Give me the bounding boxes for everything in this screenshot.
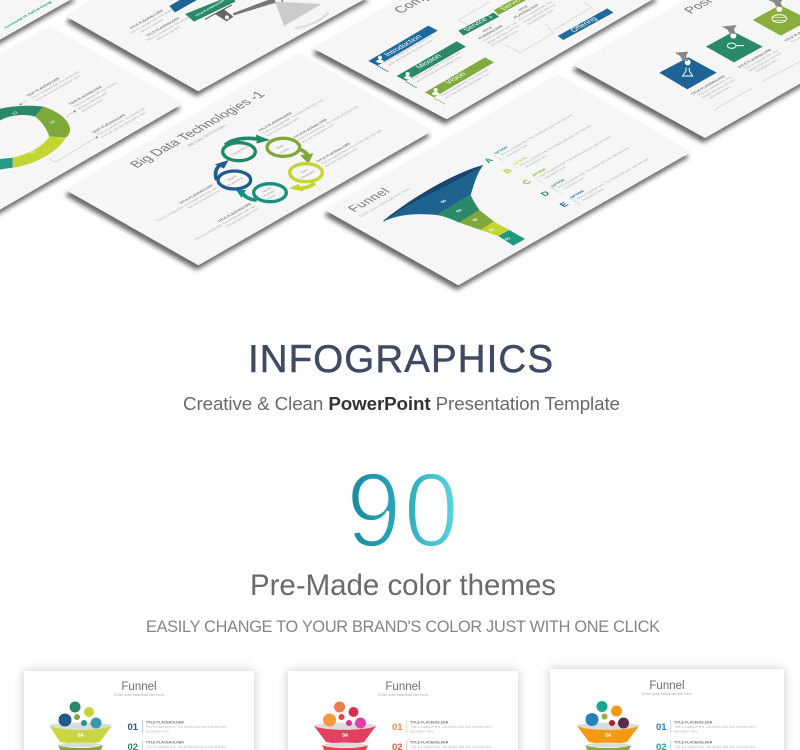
option E: This is a sample text. You simply add your own text and [575,158,650,200]
panel: theme preview 1 [24,671,254,750]
option C: description here. [543,165,568,180]
option A: description here. [505,143,530,158]
bar text: vision: This is a sample text. You simply add [439,68,490,97]
text block [473,17,526,47]
panel: isometric slides, left column [0,0,429,263]
note text: blue: This is a sample text. You [696,76,733,97]
donut labels: 03 [29,150,38,155]
text block: TITLE [481,26,494,33]
text block: text and description here. [324,147,360,167]
text block: This is a sample text. You simply [128,9,174,34]
donut segment teal [0,158,13,170]
text block: TITLE PLACEHOLDER [178,184,215,205]
option C: C [519,178,534,186]
connector lines [458,2,592,53]
card subtitle: Enter your subhead line here [114,692,164,697]
cycle arrows [215,135,315,200]
box: offering [558,8,613,40]
text block: add your own text [138,19,165,34]
cycle node: left: Processing [226,177,244,187]
cycle node: top right: Data [275,144,285,149]
slide subtitle: Enter your subhead line here [357,187,412,218]
funnel with balls: 04 [78,733,83,739]
slide: top-left fragment [0,0,75,43]
card title: Funnel [385,681,421,693]
soft shadow [295,13,328,28]
card title: Funnel [121,681,157,693]
cycle node: right [290,164,322,182]
text block: TEXT PLACEHOLDER [26,77,61,97]
cycle node: bottom: Process [264,194,277,201]
slide: pin and panel [70,0,368,89]
item 01 [392,720,491,734]
bar: introduction: Introduction [382,33,424,58]
text block: This is a sample text. You simply [145,16,191,42]
bar: mission: Mission [413,53,444,70]
leader lines [20,101,98,162]
slide title: Funnel [345,186,393,214]
text block: This is a sample text. You simply add [95,107,146,136]
funnel with balls [314,702,376,750]
funnel with balls: 04 [605,733,611,739]
bar text: introduction: your own text and description here. [386,39,435,66]
box: offering: Offering [568,15,599,33]
text block: PLACEHOLDER [477,24,504,40]
text block: This is a sample text. You simply add your own [193,205,257,241]
grey triangle [275,2,322,26]
slide: donut chart [0,28,180,213]
panel: theme preview 2 [288,671,518,750]
funnel chart: 01 [503,236,512,241]
note text: blue: description here. [708,85,733,99]
text block: simply add your own text [521,3,557,23]
panel: theme preview 3 [550,669,784,750]
text block: simply add your own text [486,24,521,44]
caption: EASILY CHANGE TO YOUR BRAND'S COLOR JUST WITH ONE CLICK [146,618,660,636]
funnel with balls: 04 [342,733,348,739]
slide: top-left fragment: Incremental VS. Radical Change [3,0,53,29]
option E: description here. [581,187,606,202]
item 01: description here. [674,730,698,734]
option E [557,155,654,208]
item 02: This is a sample text. You simply add your own text and [674,745,755,749]
note: green [706,25,763,62]
note: olive [753,0,800,36]
cycle node: right: Data [299,168,309,174]
item 01: This is a sample text. You simply add your own text and [410,725,491,729]
option C: This is a sample text. You simply add your own text and [537,136,612,178]
text block: This is a sample text. You simply add your own [296,105,360,141]
slide: company [317,0,657,117]
donut labels [11,110,57,155]
funnel chart: 05 [439,199,448,204]
card subtitle: Enter your subhead line here [378,692,428,697]
item 02: TITLE PLACEHOLDER [410,740,449,744]
text block: and description here. [525,8,556,26]
text block: TITLE PLACEHOLDER [316,142,352,163]
note text: green: TITLE PLACEHOLDER [737,48,773,69]
text block: This is a sample text. You [481,21,518,42]
slide: funnel [328,77,688,283]
cycle node: top right: Fusion [279,147,291,154]
donut segment 02 [0,106,43,123]
note text: green: This is a sample text. You [743,49,779,70]
item 02: TITLE PLACEHOLDER [146,740,184,744]
cycle node: left [218,171,251,189]
option C [519,133,616,186]
bar text: vision: your own text and description here. [443,72,492,99]
card title: Funnel [649,680,685,692]
note text: blue: TITLE PLACEHOLDER [690,75,726,95]
bar: vision [425,57,494,97]
text block: text and description here. [225,207,261,228]
note text: green [737,47,788,76]
cycle node: top left: Visualization [230,145,249,156]
text block: your own text and description here. [34,74,82,102]
text block: text and description here. [266,116,301,137]
funnel chart: 04 [455,208,464,213]
item 02: TITLE PLACEHOLDER [674,740,713,744]
text block: text and description here. [186,189,222,209]
item 01: description here. [410,730,434,734]
box: service 1: Service 1 [461,13,495,33]
item 01: 01 [128,722,139,733]
option D: description here. [562,176,587,190]
option B: OPTION [512,156,528,165]
text block: TITLE PLACEHOLDER [145,16,181,37]
cycle node: bottom: Natural [261,186,273,193]
option A: This is a sample text. You simply add your own text and [499,114,574,156]
option B: This is a sample text. You simply add your own text and [518,124,593,167]
option B: description here. [524,154,549,168]
bar text: mission: your own text and description here. [415,55,463,83]
text block: This is a sample text. You [517,0,553,21]
note text: blue: simply add your own text [700,79,736,99]
bar: vision: Vision [442,71,468,85]
title: INFOGRAPHICS [248,338,553,381]
tag: green [185,0,235,22]
note underlines [715,62,800,109]
item 02: This is a sample text. You simply add your own text and [410,745,491,749]
text block: TEXT PLACEHOLDER [91,114,127,134]
option D [538,144,635,198]
cycle node: left: Signal [226,175,238,181]
option E: OPTION [569,190,585,199]
text block: your own text and description here. [100,111,148,138]
option A: A [481,156,496,164]
item 01: 01 [656,722,667,733]
bar leaders [377,66,445,104]
note text: blue [690,73,741,102]
option C: OPTION [531,168,547,177]
text block: TITLE [517,5,530,12]
big number 90: 90 [346,450,461,569]
item 01: description here. [146,730,170,734]
cycle node: right: Integration [299,169,317,179]
text block: This is a sample text. You simply add your own [320,129,383,165]
item 02 [128,740,227,750]
text block: text and description here. [301,123,336,143]
text block [68,80,126,112]
slide subtitle: Big Data Technologies [186,123,228,147]
text block: PLACEHOLDER [513,3,540,19]
heading: pre-made color themes: Pre-Made color themes [250,569,556,602]
donut segment 04 [35,107,70,137]
bar text: mission: This is a sample text. You simply add [411,51,462,80]
text block: add your own text [155,26,181,41]
option A: OPTION [493,146,509,155]
option D: This is a sample text. You simply add your own text and [556,146,631,189]
bar: mission [397,41,466,81]
subtitle: Creative & Clean PowerPoint Presentation Template [183,393,620,414]
item 01: TITLE PLACEHOLDER [146,720,184,724]
funnel with balls [577,701,639,750]
cycle node: top left [223,143,255,161]
item 01: TITLE PLACEHOLDER [674,720,713,724]
cycle node: bottom: Language [261,189,276,198]
item 02 [392,740,491,750]
tag: blue [169,0,204,12]
text block: description here. [80,98,105,112]
text block: This is a sample text. You simply add [30,70,81,99]
item 02 [656,740,755,750]
stand: pin arm [205,0,282,21]
option B: B [500,167,515,175]
cycle node: top right [267,138,300,156]
funnel chart [383,165,525,246]
text block: This is a sample text. You simply add your own [155,186,218,223]
funnel chart: 02 [487,227,496,232]
note: blue [659,52,717,89]
bar: introduction [368,26,438,66]
item 01: TITLE PLACEHOLDER [410,720,449,724]
slide: big data technologies [69,55,429,263]
text block [509,0,562,26]
donut labels: 02 [11,110,20,115]
option A [481,111,578,164]
text block: TEXT PLACEHOLDER [68,85,104,105]
item 01: This is a sample text. You simply add your own text and [674,725,755,729]
option E: E [557,200,571,208]
funnel chart: 03 [471,217,480,222]
item 01: 01 [392,722,403,733]
item 01: This is a sample text. You simply add your own text and [146,725,227,729]
text block: TITLE PLACEHOLDER [128,9,165,30]
cycle node: bottom [254,184,286,202]
text block: TITLE PLACEHOLDER [217,202,253,223]
donut labels: 04 [48,119,57,124]
card subtitle: Enter your subhead line here [642,691,692,696]
option D: OPTION [550,178,566,187]
option B [500,122,597,175]
note text: green: description here. [755,58,780,73]
item 02: This is a sample text. You simply add your own text and [146,745,227,749]
bar text: introduction: This is a sample text. You simply add [382,35,433,64]
box: service 2 [494,0,533,15]
note text: green: simply add your own text [747,52,782,72]
text block: TITLE PLACEHOLDER [257,111,294,132]
slide: post it [577,0,800,136]
donut segment 03 [13,137,66,168]
item 01 [128,720,227,734]
panel: isometric slides, right column [317,0,800,283]
slide title: Big Data Technologies -1 [126,89,268,170]
text block: This is a sample text. You simply [72,82,118,108]
text block: and description here. [490,29,520,47]
text block: add your own text and [76,92,108,110]
text block: This is a sample text. You simply add your own [261,98,325,134]
item 01 [656,720,755,734]
option D: D [538,190,552,198]
funnel with balls [50,702,112,750]
text block: TITLE PLACEHOLDER [292,118,329,139]
